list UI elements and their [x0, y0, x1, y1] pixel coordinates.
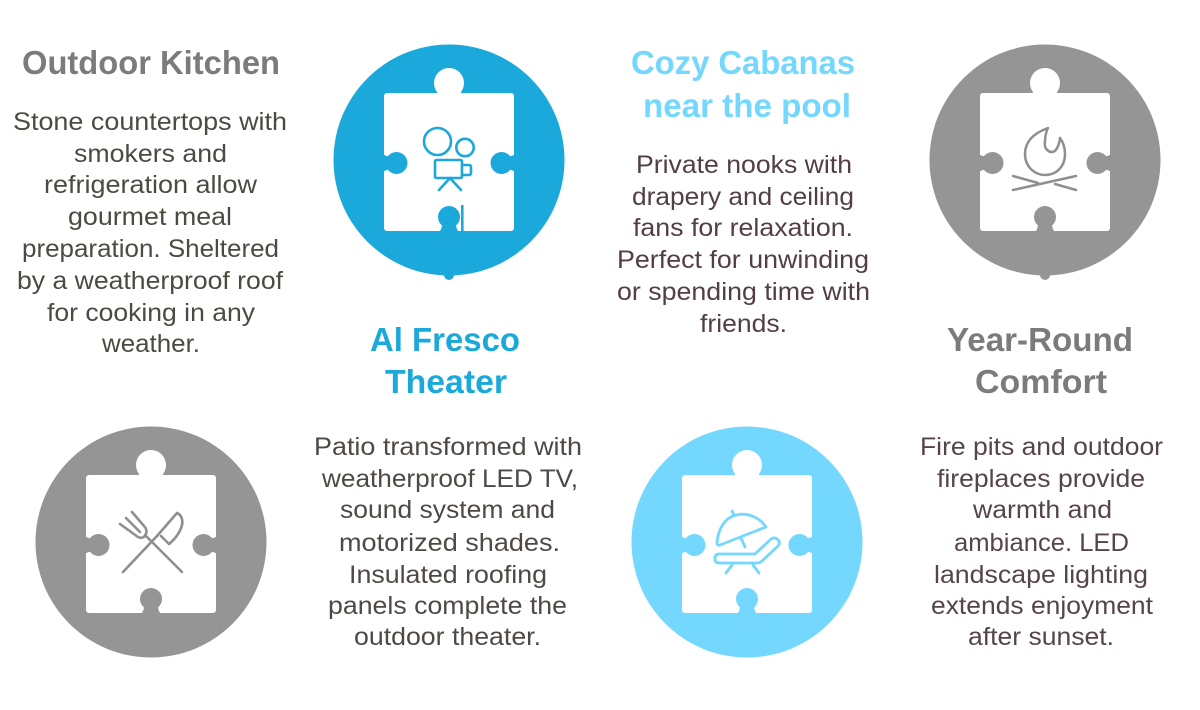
panel: Cozy Cabanas text [617, 44, 870, 338]
heading: Outdoor Kitchen: Outdoor Kitchen [22, 44, 280, 81]
text block: Year-Round Comfort description: warmth and [972, 496, 1112, 524]
text block: Year-Round Comfort description: after sunset. [968, 623, 1114, 651]
panel: Cozy Cabanas puzzle badge [632, 426, 862, 658]
panel: Outdoor Kitchen text [13, 44, 287, 358]
text block: Cozy Cabanas description: fans for relaxation. [633, 214, 853, 242]
text block: Outdoor Kitchen description: weather. [101, 330, 200, 358]
text block: Year-Round Comfort description: extends enjoyment [931, 592, 1153, 620]
text block: Year-Round Comfort description: landscape lighting [934, 561, 1148, 589]
text block: Cozy Cabanas description: friends. [700, 310, 787, 338]
text block: Year-Round Comfort description: ambiance. LED [954, 529, 1129, 557]
text block: Al Fresco Theater description: motorized shades. [339, 529, 560, 557]
text block: Year-Round Comfort description [920, 433, 1163, 651]
text block: Al Fresco Theater description: weatherproof LED TV, [321, 465, 578, 493]
text block: Cozy Cabanas description: drapery and ceiling [632, 183, 854, 211]
heading: Al Fresco Theater: Theater [385, 363, 507, 400]
heading: Year-Round Comfort: Year-Round [947, 321, 1133, 358]
text block: Outdoor Kitchen description: by a weatherproof roof [17, 267, 283, 295]
text block: Outdoor Kitchen description: gourmet meal [68, 203, 232, 231]
text block: Cozy Cabanas description: Private nooks with [636, 151, 852, 179]
text block: Year-Round Comfort description: Fire pits and outdoor [920, 433, 1163, 461]
text block: Al Fresco Theater description: Patio transformed with [314, 433, 582, 461]
text block: Al Fresco Theater description: Insulated roofing [349, 561, 547, 589]
icon: campfire [1013, 128, 1076, 190]
heading: Cozy Cabanas near the pool [631, 44, 855, 124]
panel: Outdoor Kitchen puzzle badge [36, 426, 266, 658]
text block: Outdoor Kitchen description: Stone countertops with [13, 108, 287, 136]
heading: Al Fresco Theater: Al Fresco [370, 321, 520, 358]
panel: Al Fresco Theater text [314, 321, 582, 651]
heading: Cozy Cabanas near the pool: Cozy Cabanas [631, 44, 855, 81]
heading: Cozy Cabanas near the pool: near the pool [643, 87, 851, 124]
text block: Cozy Cabanas description: or spending time with [617, 278, 870, 306]
text block: Outdoor Kitchen description [13, 108, 287, 358]
icon: crossed fork and knife [120, 512, 182, 572]
icon: beach umbrella and lounger [715, 511, 779, 573]
text block: Cozy Cabanas description: Perfect for unwinding [617, 246, 869, 274]
text block: Al Fresco Theater description: panels complete the [328, 592, 567, 620]
icon: movie camera [424, 128, 474, 190]
panel: Year-Round Comfort puzzle badge [930, 44, 1160, 280]
text block: Al Fresco Theater description: outdoor theater. [354, 623, 541, 651]
text block: Cozy Cabanas description [617, 151, 870, 338]
text block: Year-Round Comfort description: fireplaces provide [937, 465, 1145, 493]
text block: Outdoor Kitchen description: preparation. Sheltered [22, 235, 279, 263]
text block: Outdoor Kitchen description: smokers and [74, 140, 227, 168]
heading: Year-Round Comfort: Comfort [975, 363, 1107, 400]
text block: Al Fresco Theater description: sound system and [340, 496, 555, 524]
heading: Year-Round Comfort [947, 321, 1133, 400]
text block: Outdoor Kitchen description: for cooking in any [47, 299, 256, 327]
panel: Year-Round Comfort text [920, 321, 1163, 651]
text block: Al Fresco Theater description [314, 433, 582, 651]
panel: Al Fresco Theater puzzle badge [334, 44, 564, 280]
heading: Al Fresco Theater [370, 321, 520, 400]
text block: Outdoor Kitchen description: refrigeration allow [44, 171, 258, 199]
